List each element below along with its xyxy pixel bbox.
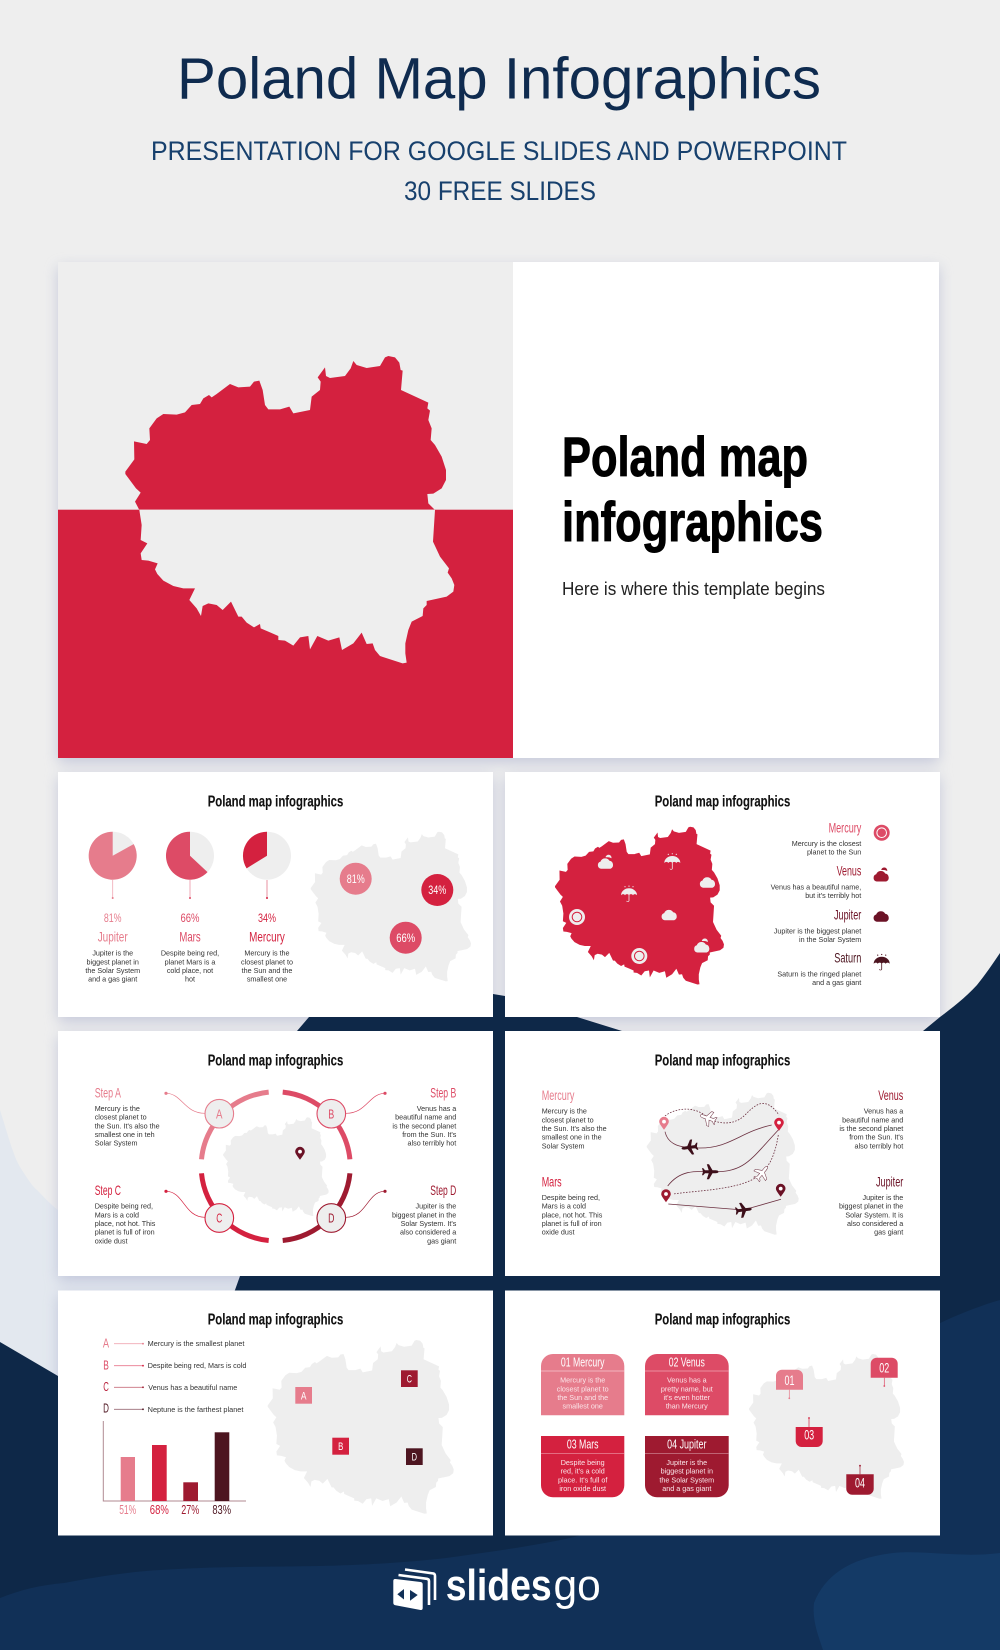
legend row B — [103, 1357, 246, 1372]
map with numbered tags: 03 — [804, 1428, 814, 1443]
text: Venus: Venus has a — [864, 1107, 903, 1116]
card: 02 Venus: pretty name, but — [661, 1384, 713, 1393]
text: Mars: oxide dust — [542, 1228, 574, 1237]
column: Mars: hot — [185, 975, 195, 984]
text: Venus: beautiful name and — [842, 1115, 903, 1124]
text: Mars: Mars is a cold — [542, 1202, 586, 1211]
subtitle line 1: PRESENTATION FOR GOOGLE SLIDES AND POWERPOINT — [151, 136, 847, 166]
bar chart: 51% — [119, 1502, 136, 1517]
map with numbered tags: 04 — [855, 1475, 865, 1490]
text: Mars — [542, 1174, 603, 1237]
heading: Poland map infographics — [208, 1053, 343, 1070]
legend: Mercury: Mercury is the closest — [792, 839, 861, 848]
bar chart: 27% — [181, 1502, 200, 1517]
panel: weather map slide — [505, 772, 940, 1017]
column: Jupiter: the Solar System — [85, 966, 140, 975]
text: Step C: place, not hot. This — [95, 1219, 156, 1228]
legend: Mercury: planet to the Sun — [807, 848, 861, 857]
bar chart — [103, 1421, 246, 1517]
card: 01 Mercury: Mercury is the — [560, 1376, 605, 1385]
map with numbered tags — [749, 1354, 904, 1499]
map with percentage bubbles: 66% — [396, 931, 415, 945]
map: Poland flag cut-out — [125, 356, 454, 663]
ring segments — [202, 1092, 350, 1240]
step C connector and badge — [164, 1190, 234, 1232]
card: 03 Mars: 03 Mars — [567, 1438, 599, 1452]
card: 01 Mercury: the Sun and the — [557, 1393, 608, 1402]
card: 03 Mars: red, it's a cold — [561, 1467, 605, 1476]
legend: Jupiter: in the Solar System — [799, 935, 861, 944]
text: Mercury: Mercury — [542, 1087, 574, 1103]
legend row B: Despite being red, Mars is cold — [148, 1361, 246, 1370]
text: Step A: Step A — [95, 1084, 121, 1100]
map with percentage bubbles — [311, 832, 471, 981]
card: 03 Mars — [541, 1436, 624, 1497]
text: Venus: is the second planet — [839, 1124, 903, 1133]
subtitle line 2: 30 FREE SLIDES — [404, 176, 596, 206]
text: Step B: beautiful name and — [395, 1113, 456, 1122]
text: Venus: also terribly hot — [855, 1141, 903, 1150]
map with percentage bubbles: 81% — [347, 872, 365, 886]
bar chart: 83% — [212, 1502, 231, 1517]
heading: Poland map infographics — [208, 1312, 343, 1329]
column: Jupiter: biggest planet in — [87, 957, 139, 966]
logo: slidesgo: go — [554, 1561, 601, 1610]
title: Poland Map Infographics — [177, 46, 821, 111]
legend row D — [103, 1401, 243, 1416]
card: 02 Venus: than Mercury — [666, 1402, 708, 1411]
legend row A: A — [103, 1335, 109, 1350]
text: Step A: the Sun. It's also the — [95, 1121, 160, 1130]
text: Step D — [392, 1182, 457, 1245]
map — [223, 1117, 329, 1216]
text: Jupiter: Jupiter is the — [863, 1193, 903, 1202]
card: 02 Venus — [645, 1354, 729, 1415]
step A connector and badge: A — [216, 1106, 223, 1121]
text: Step B: Step B — [430, 1084, 456, 1100]
column: Mars: cold place, not — [167, 966, 213, 975]
legend row C — [103, 1379, 237, 1394]
text: Step D: gas giant — [427, 1236, 456, 1245]
legend: Mercury — [792, 819, 890, 857]
map with letter markers: B — [338, 1441, 343, 1453]
legend: Saturn: Saturn is the ringed planet — [777, 969, 861, 978]
legend: Mercury: Mercury — [829, 819, 861, 835]
column: Mars — [161, 911, 219, 984]
card: 02 Venus: Venus has a — [667, 1376, 707, 1385]
heading: Poland map infographics — [208, 794, 343, 811]
text: Step D: biggest planet in the — [392, 1210, 456, 1219]
text: Mars: Mars — [542, 1174, 562, 1190]
text: Mercury — [542, 1087, 607, 1150]
legend: Saturn: Saturn — [834, 950, 861, 966]
text: Step C: Despite being red, — [95, 1202, 153, 1211]
card: 04 Jupiter: 04 Jupiter — [667, 1438, 706, 1452]
step B connector and badge — [317, 1092, 387, 1128]
legend: Saturn: and a gas giant — [812, 978, 861, 987]
heading: Poland map infographics — [655, 794, 790, 811]
text: Step C — [95, 1182, 156, 1245]
column: Mars: Despite being red, — [161, 949, 219, 958]
text: Jupiter: biggest planet in the — [839, 1202, 903, 1211]
icons: location pins — [659, 1117, 786, 1202]
legend: Jupiter: Jupiter is the biggest planet — [774, 926, 861, 935]
map with letter markers: A — [301, 1390, 307, 1402]
pie: Jupiter — [89, 832, 137, 899]
column: Jupiter — [85, 911, 140, 984]
card: 01 Mercury: 01 Mercury — [561, 1355, 605, 1369]
text: Step D: Step D — [430, 1182, 456, 1198]
text: Step B — [392, 1084, 457, 1148]
column: Mercury: 34% — [258, 911, 276, 925]
legend: Venus: but it's terribly hot — [805, 891, 861, 900]
card: 02 Venus: it's even hotter — [664, 1393, 711, 1402]
flag background — [58, 262, 513, 758]
text: Venus: Venus — [878, 1087, 903, 1103]
column: Mercury: the Sun and the — [242, 966, 292, 975]
card: 04 Jupiter: biggest planet in — [661, 1467, 713, 1476]
step B connector and badge: B — [328, 1106, 334, 1121]
hero heading: infographics — [562, 490, 823, 553]
text: Jupiter: Jupiter — [876, 1174, 904, 1190]
legend: Jupiter: Jupiter — [834, 907, 862, 923]
panel: cards slide — [505, 1290, 940, 1536]
hero subheading: Here is where this template begins — [562, 579, 825, 599]
text: Mercury: Solar System — [542, 1141, 584, 1150]
hero heading: Poland map — [562, 425, 808, 488]
heading: Poland map infographics — [655, 1053, 790, 1070]
card: 02 Venus: 02 Venus — [669, 1355, 705, 1369]
card: 03 Mars: place. It's full of — [558, 1475, 607, 1484]
map with numbered tags: 01 — [784, 1373, 794, 1388]
pie: Mars — [166, 832, 214, 899]
legend: Jupiter — [774, 907, 889, 944]
bar chart: 68% — [150, 1502, 169, 1517]
text: Mercury: the Sun. It's also the — [542, 1124, 607, 1133]
text: Step D: also considered a — [400, 1228, 456, 1237]
column: Mercury: closest planet to — [241, 957, 293, 966]
panel: pie charts slide — [58, 772, 493, 1017]
legend row C: Venus has a beautiful name — [148, 1383, 237, 1392]
card: 04 Jupiter — [645, 1436, 729, 1497]
column: Jupiter: and a gas giant — [88, 975, 137, 984]
map with weather icons — [555, 827, 724, 985]
legend row A: Mercury is the smallest planet — [148, 1339, 244, 1348]
panel: flight routes slide — [505, 1031, 940, 1276]
column: Jupiter: 81% — [104, 911, 122, 925]
step D connector and badge: D — [328, 1211, 334, 1226]
column: Mars: Mars — [179, 929, 201, 945]
legend row A — [103, 1335, 244, 1350]
panel: steps ring slide — [58, 1031, 493, 1276]
text: Venus: from the Sun. It's — [849, 1133, 904, 1142]
wordmark: slides — [446, 1561, 552, 1610]
column: Mercury: smallest one — [247, 975, 287, 984]
card: 04 Jupiter: and a gas giant — [662, 1484, 711, 1493]
text: Step A: Solar System — [95, 1139, 137, 1148]
text: Step B: also terribly hot — [408, 1139, 456, 1148]
panel: hero slide — [58, 262, 939, 758]
panel: bar chart slide — [58, 1290, 493, 1536]
heading: Poland map infographics — [655, 1312, 790, 1329]
text: Mercury: Mercury is the — [542, 1107, 587, 1116]
card: 04 Jupiter: the Solar System — [659, 1475, 714, 1484]
text: Venus — [839, 1087, 904, 1150]
map — [647, 1093, 799, 1235]
column: Mercury: Mercury is the — [244, 949, 290, 958]
text: Jupiter: also considered a — [847, 1219, 903, 1228]
legend: Saturn — [777, 950, 890, 987]
text: Step B: Venus has a — [417, 1104, 456, 1113]
text: Jupiter: gas giant — [874, 1228, 903, 1237]
step D connector and badge — [317, 1190, 387, 1232]
column: Mercury: Mercury — [249, 929, 285, 945]
text: Mars: Despite being red, — [542, 1193, 600, 1202]
legend row D: D — [103, 1401, 109, 1416]
text: Mercury: closest planet to — [542, 1115, 594, 1124]
map with percentage bubbles: 34% — [428, 883, 447, 897]
legend: Venus: Venus has a beautiful name, — [771, 883, 861, 892]
card: 03 Mars: Despite being — [561, 1458, 605, 1467]
text: Step C: oxide dust — [95, 1236, 127, 1245]
text: Step B: from the Sun. It's — [402, 1130, 457, 1139]
card: 01 Mercury: closest planet to — [557, 1384, 609, 1393]
flight routes — [665, 1103, 781, 1210]
text: Step C: Mars is a cold — [95, 1210, 139, 1219]
legend row B: B — [103, 1357, 109, 1372]
text: Mars: planet is full of iron — [542, 1219, 602, 1228]
text: Step A: smallest one in teh — [95, 1130, 155, 1139]
legend: Venus — [771, 863, 889, 900]
text: Jupiter: Solar System. It is — [845, 1210, 904, 1219]
text: Mercury: smallest one in the — [542, 1133, 602, 1142]
text: Step A: Mercury is the — [95, 1104, 140, 1113]
map with letter markers: D — [412, 1452, 417, 1464]
map with letter markers — [268, 1340, 454, 1514]
text: Jupiter — [839, 1174, 904, 1237]
column: Mercury — [241, 911, 293, 984]
column: Mars: 66% — [180, 911, 200, 925]
text: Step C: Step C — [95, 1182, 121, 1198]
step A connector and badge — [164, 1092, 234, 1128]
card: 04 Jupiter: Jupiter is the — [666, 1458, 707, 1467]
map with numbered tags: 02 — [879, 1361, 889, 1376]
icon: location pin — [295, 1147, 305, 1160]
text: Step A — [95, 1084, 160, 1148]
text: Step A: closest planet to — [95, 1113, 147, 1122]
icon: stacked slides — [393, 1570, 435, 1610]
legend: Venus: Venus — [837, 863, 861, 879]
card: 01 Mercury: smallest one — [563, 1402, 603, 1411]
pie: Mercury — [243, 832, 291, 899]
legend row D: Neptune is the farthest planet — [148, 1405, 243, 1414]
text: Step B: is the second planet — [392, 1121, 456, 1130]
text: Step C: planet is full of iron — [95, 1228, 155, 1237]
hero heading — [562, 425, 823, 553]
card: 01 Mercury — [541, 1354, 624, 1415]
column: Jupiter: Jupiter is the — [92, 949, 133, 958]
legend row C: C — [103, 1379, 109, 1394]
column: Jupiter: Jupiter — [98, 929, 128, 945]
column: Mars: planet Mars is a — [165, 957, 215, 966]
card: 03 Mars: iron oxide dust — [559, 1484, 606, 1493]
text: Mars: place, not hot. This — [542, 1210, 603, 1219]
icons: airplanes — [681, 1108, 773, 1219]
text: Step D: Jupiter is the — [416, 1202, 456, 1211]
logo: slidesgo — [393, 1561, 601, 1610]
text: Step D: Solar System. It's — [401, 1219, 457, 1228]
step C connector and badge: C — [216, 1211, 222, 1226]
map with letter markers: C — [407, 1374, 412, 1386]
